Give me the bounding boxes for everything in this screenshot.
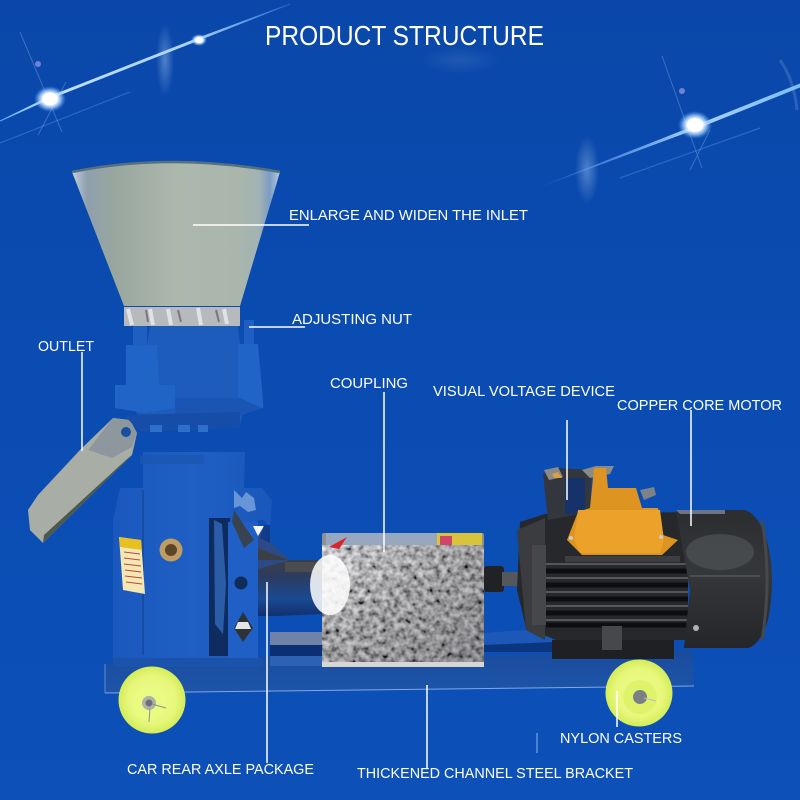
- machine: pellet mill: [28, 162, 772, 734]
- electric motor: [517, 510, 772, 659]
- base channel steel frame: [105, 628, 694, 693]
- lens flare right: [545, 56, 800, 185]
- callout: copper core motor: COPPER CORE MOTOR: [617, 397, 782, 414]
- callout: nylon casters: NYLON CASTERS: [560, 730, 682, 747]
- callout: outlet: [38, 338, 94, 451]
- brass oil cap: [160, 538, 182, 562]
- wheel right: [606, 660, 672, 726]
- outlet chute: [28, 418, 137, 543]
- visual voltage device: [543, 466, 614, 520]
- callout: coupling: COUPLING: [330, 375, 408, 392]
- lens flare left: [0, 4, 290, 135]
- lower body: [113, 452, 272, 667]
- upper body: [115, 320, 263, 432]
- axle package: [255, 528, 322, 616]
- title: PRODUCT STRUCTURE: [265, 20, 544, 51]
- callout: channel steel bracket: THICKENED CHANNEL STEEL BRACKET: [357, 765, 633, 782]
- warning label: [119, 537, 145, 594]
- callout: visual voltage device: VISUAL VOLTAGE DEVICE: [433, 383, 615, 400]
- callout: adjusting nut: ADJUSTING NUT: [292, 311, 412, 328]
- orange terminal box: [567, 468, 678, 555]
- shaft: [484, 566, 518, 592]
- coupling housing: [310, 533, 484, 667]
- wheel left: [118, 666, 186, 734]
- callout: car rear axle package: CAR REAR AXLE PACKAGE: [127, 761, 314, 778]
- hopper: [72, 162, 280, 326]
- callout: outlet: OUTLET: [38, 338, 94, 355]
- callout: inlet: ENLARGE AND WIDEN THE INLET: [289, 207, 528, 224]
